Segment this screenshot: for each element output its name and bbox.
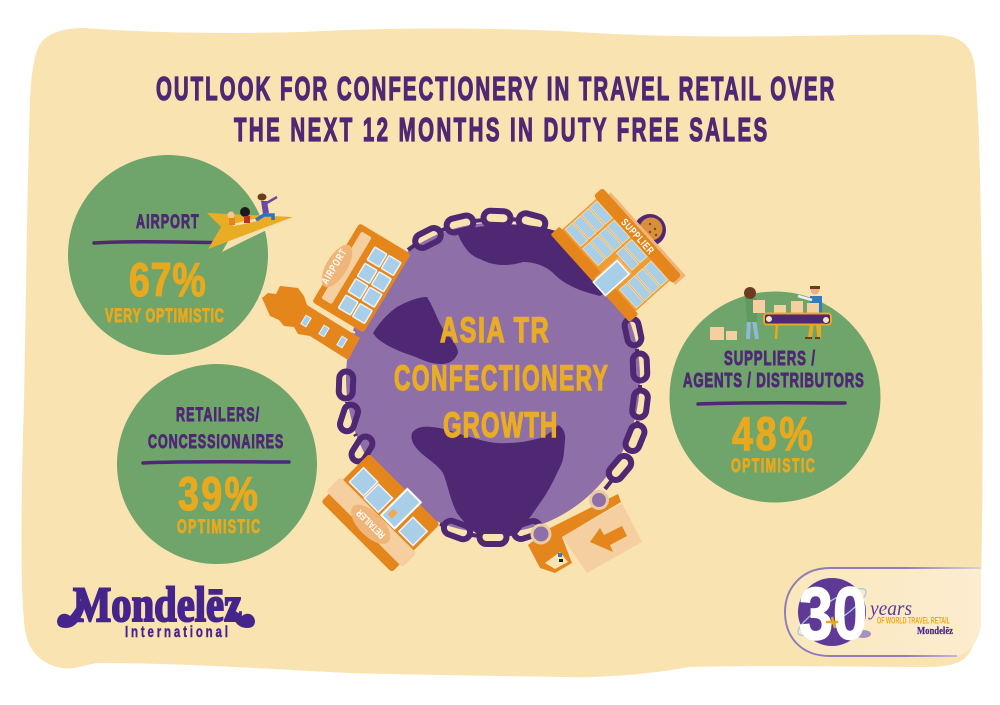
retailers label	[148, 404, 284, 453]
globe headline	[394, 311, 608, 445]
globe headline: ASIA TR	[440, 311, 549, 350]
continent: west	[373, 297, 458, 364]
title: OUTLOOK FOR CONFECTIONERY IN TRAVEL RETAIL OVER	[156, 70, 834, 107]
suppliers label: SUPPLIERS /	[724, 347, 815, 370]
badge: 30 years of world travel retail	[785, 568, 981, 656]
title: THE NEXT 12 MONTHS IN DUTY FREE SALES	[234, 111, 767, 148]
badge globe	[798, 578, 866, 646]
suppliers label	[683, 347, 864, 392]
icon: supplier building	[551, 186, 686, 324]
continent: north	[457, 225, 625, 296]
globe	[346, 223, 640, 534]
globe headline: GROWTH	[443, 407, 557, 445]
airport sign: AIRPORT	[319, 247, 349, 286]
retailers sentiment: OPTIMISTIC	[177, 516, 260, 538]
logo: Mondelez International: International	[125, 622, 228, 640]
icon: delivery dock	[528, 492, 642, 573]
globe headline: CONFECTIONERY	[394, 359, 608, 398]
icon: retailer building	[318, 449, 444, 575]
icon: airport building	[262, 223, 411, 360]
retailers label: RETAILERS/	[176, 404, 260, 426]
panel: airport	[68, 155, 268, 355]
airport label: AIRPORT	[136, 211, 199, 233]
icon: paper plane with travellers	[207, 194, 293, 252]
retailers label: CONCESSIONAIRES	[148, 431, 284, 453]
retailer sign: RETAILER	[353, 507, 387, 541]
continent: south	[411, 425, 565, 534]
badge small logo: Mondelēz	[917, 626, 953, 637]
supplier sign: SUPPLIER	[619, 217, 656, 257]
retailers percentage: 39%	[178, 468, 258, 521]
suppliers sentiment: OPTIMISTIC	[731, 455, 815, 477]
suppliers percentage: 48%	[732, 408, 813, 461]
logo: Mondelez International: Mondelēz	[73, 578, 242, 633]
airport percentage: 67%	[129, 254, 206, 307]
icon: conveyor belt with workers	[710, 286, 831, 340]
panel: retailers	[117, 364, 317, 564]
chain around globe	[338, 211, 649, 544]
badge numeral: 30	[799, 572, 867, 655]
badge years: years	[868, 596, 912, 620]
panel: suppliers	[670, 292, 880, 502]
title	[156, 70, 834, 148]
suppliers label: AGENTS / DISTRIBUTORS	[683, 369, 864, 392]
airport sentiment: VERY OPTIMISTIC	[105, 305, 224, 327]
